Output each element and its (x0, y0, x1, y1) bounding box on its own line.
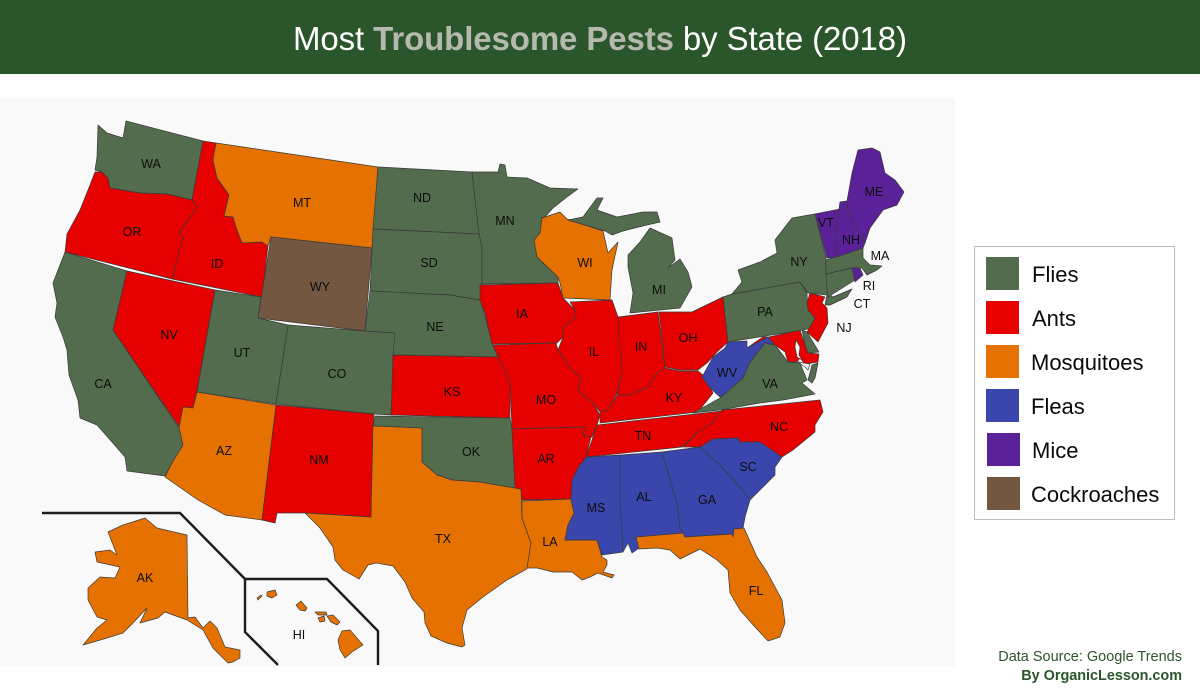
state: Nebraska (365, 291, 498, 357)
state: Minnesota: MN (495, 214, 515, 228)
state: Pennsylvania: PA (757, 305, 774, 319)
state: North Dakota: ND (413, 191, 431, 205)
state: Minnesota (472, 164, 578, 284)
legend item: Mice: Mice (1032, 438, 1078, 463)
state: Nevada (113, 271, 215, 428)
state: Texas: TX (435, 532, 452, 546)
state: Louisiana: LA (542, 535, 558, 549)
state: Arizona: AZ (216, 444, 232, 458)
state: New York (732, 214, 852, 305)
title banner (0, 0, 1200, 74)
state: Vermont (815, 209, 840, 258)
state: Indiana (617, 312, 665, 395)
state: Utah: UT (234, 346, 251, 360)
state: Rhode Island (852, 268, 863, 282)
state: Georgia: GA (698, 493, 717, 507)
state: Kansas: KS (444, 385, 460, 399)
state: Indiana: IN (635, 340, 647, 354)
state: New Hampshire (836, 201, 865, 257)
legend item: Flies (986, 257, 1078, 290)
state: Louisiana (522, 499, 614, 580)
state: Wisconsin: WI (577, 256, 593, 270)
state: Oklahoma: OK (462, 445, 481, 459)
legend item: Fleas: Fleas (1031, 394, 1085, 419)
legend item: Fleas (986, 389, 1085, 422)
state: Wisconsin (534, 212, 618, 300)
legend item: Cockroaches (987, 477, 1159, 510)
state: Massachusetts (826, 248, 882, 275)
state: Iowa (480, 283, 576, 344)
state: New Mexico: NM (309, 453, 329, 467)
state: Mississippi: MS (587, 501, 605, 515)
state: South Dakota: SD (420, 256, 438, 270)
state: Wyoming: WY (310, 280, 331, 294)
state: Colorado: CO (328, 367, 347, 381)
state: Missouri (493, 343, 600, 437)
state: South Carolina (700, 438, 782, 500)
state: Hawaii (257, 590, 363, 658)
map: contiguous United States (53, 121, 904, 647)
state: Oregon: OR (123, 225, 141, 239)
state: Kentucky: KY (666, 391, 683, 405)
state: Arkansas: AR (537, 452, 555, 466)
inset frame: Alaska and Hawaii dividers (42, 513, 378, 665)
state: West Virginia: WV (717, 366, 738, 380)
legend item: Mosquitoes: Mosquitoes (1031, 350, 1144, 375)
state: New Jersey (807, 293, 828, 342)
legend item: Ants: Ants (1032, 306, 1076, 331)
state: Michigan (568, 198, 692, 313)
legend (974, 246, 1174, 520)
panel: map background (0, 98, 955, 666)
state: Washington (95, 121, 203, 200)
state: North Dakota (373, 167, 479, 234)
outside state labels: northeast: MA (871, 249, 890, 263)
state: Pennsylvania (723, 282, 815, 342)
state: New York: NY (790, 255, 808, 269)
state: Connecticut (826, 268, 855, 297)
legend item: Ants (986, 301, 1076, 334)
state: Illinois: IL (589, 345, 599, 359)
state: Virginia: VA (762, 377, 779, 391)
state: Maryland (747, 330, 819, 364)
state: Florida (636, 528, 785, 641)
state: New Mexico (262, 405, 374, 523)
state: Montana (213, 143, 378, 248)
state: Illinois (558, 300, 622, 412)
state: Idaho: ID (211, 257, 223, 271)
state: Hawaii: HI (293, 628, 305, 642)
outside state labels: northeast: CT (854, 297, 871, 311)
state: South Carolina: SC (739, 460, 757, 474)
state: Alaska: AK (137, 571, 154, 585)
legend item: Mice (987, 433, 1078, 466)
state: Idaho (172, 141, 268, 297)
water: Chesapeake Bay (795, 340, 810, 370)
state: Arkansas (512, 427, 591, 500)
state: Tennessee: TN (635, 429, 651, 443)
state: Vermont: VT (818, 216, 834, 230)
state: California (53, 252, 183, 476)
state: Alabama (620, 452, 683, 553)
state: Delaware (802, 330, 819, 353)
state: West Virginia (702, 337, 775, 397)
state: Maine: ME (865, 185, 883, 199)
state: Oklahoma (373, 416, 515, 488)
state: Maine (847, 148, 904, 243)
outside state labels: northeast: NJ (836, 321, 852, 335)
state: North Carolina (683, 400, 823, 457)
state: Kentucky (600, 368, 713, 423)
state: Alaska (83, 518, 240, 663)
state: Virginia (693, 343, 818, 413)
legend item: Flies: Flies (1032, 262, 1078, 287)
outside state labels: northeast (836, 249, 890, 335)
data source credit: Data Source: Google Trends (998, 649, 1182, 665)
state: Montana: MT (293, 196, 311, 210)
state: New Hampshire: NH (842, 233, 860, 247)
state: Colorado (276, 325, 395, 415)
data source credit (998, 649, 1182, 684)
state: Nebraska: NE (426, 320, 444, 334)
state: Michigan: MI (652, 283, 666, 297)
legend item: Cockroaches: Cockroaches (1031, 482, 1159, 507)
state: Washington: WA (141, 157, 161, 171)
state: Georgia (662, 447, 750, 537)
state: Mississippi (565, 455, 623, 555)
state: South Dakota (370, 229, 482, 300)
state: Kansas (391, 355, 510, 418)
state: Oregon (65, 172, 197, 279)
title banner: Most Troublesome Pests by State (2018) (293, 20, 907, 57)
state: Ohio (659, 297, 728, 370)
state: Arizona (165, 392, 276, 520)
outside state labels: northeast: RI (863, 279, 875, 293)
state: Ohio: OH (679, 331, 697, 345)
data source credit: By OrganicLesson.com (1021, 668, 1182, 684)
state: Iowa: IA (516, 307, 529, 321)
state: California: CA (94, 377, 112, 391)
state: Florida: FL (749, 584, 763, 598)
state: North Carolina: NC (770, 420, 788, 434)
state: Alabama: AL (636, 490, 652, 504)
state: Utah (197, 290, 288, 404)
legend item: Mosquitoes (986, 345, 1144, 378)
state: Missouri: MO (536, 393, 556, 407)
state: Nevada: NV (160, 328, 178, 342)
state: Tennessee (586, 411, 722, 457)
state: Texas (305, 426, 531, 647)
state: Wyoming (258, 237, 372, 331)
